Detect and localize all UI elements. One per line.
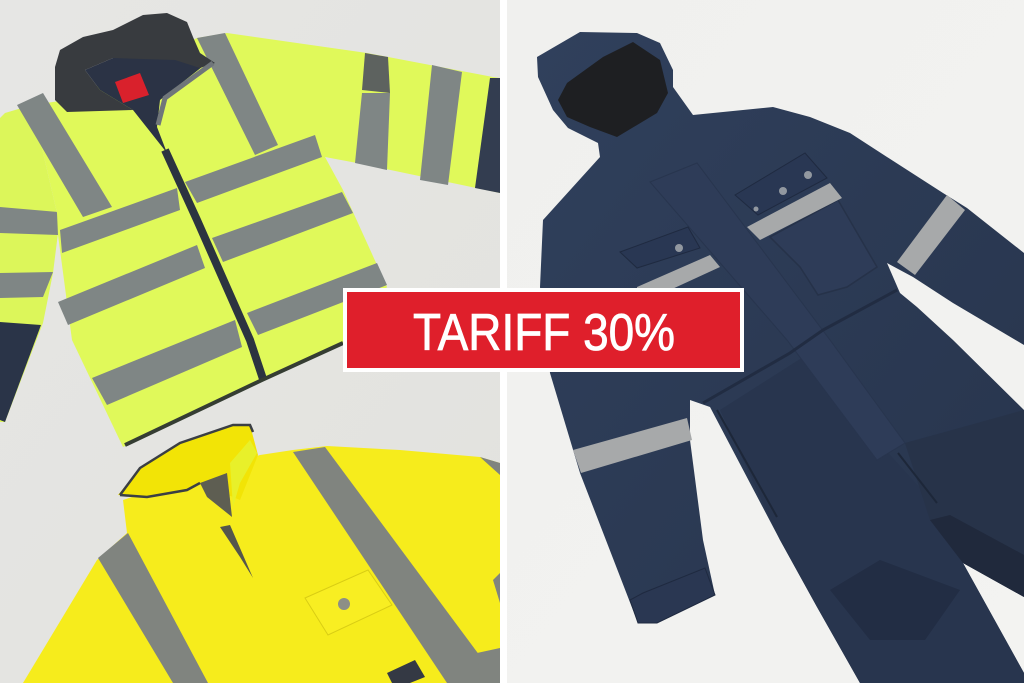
right cuff — [475, 78, 500, 193]
chest pocket flap left — [620, 227, 700, 268]
crotch line — [898, 453, 937, 503]
yellow jacket collar — [118, 425, 258, 500]
interior lining — [200, 473, 232, 517]
chest reflective band left — [637, 255, 720, 290]
hem — [125, 343, 343, 445]
yellow jacket label — [387, 660, 425, 683]
panel: lime hi-vis jacket — [0, 13, 500, 447]
pocket slit — [717, 410, 777, 517]
collar edge piping — [120, 425, 253, 495]
grey zipper tape — [158, 63, 213, 125]
collar flap highlight — [230, 440, 257, 507]
leg shading — [720, 340, 1024, 683]
collar front piping — [120, 483, 200, 497]
sleeve label patch — [362, 53, 390, 93]
front placket — [650, 163, 905, 460]
inner lining — [85, 58, 207, 153]
lower interior lining — [220, 525, 253, 578]
chest reflective band right — [747, 183, 842, 240]
banner text: TARIFF 30% — [413, 304, 675, 362]
coverall outline — [537, 32, 1024, 683]
pocket button — [338, 598, 350, 610]
collar — [55, 13, 215, 112]
chest pocket right — [770, 200, 877, 295]
cuff tab — [630, 568, 715, 623]
sleeve reflective band right — [897, 195, 965, 275]
zipper — [165, 150, 263, 379]
reflective stripes — [17, 33, 462, 405]
sleeve reflective band left — [573, 418, 692, 473]
waist seam — [703, 290, 897, 403]
coverall buttons — [675, 171, 812, 252]
chest pocket flap right — [735, 153, 827, 215]
crotch shadow — [930, 515, 1024, 597]
pocket flap — [305, 570, 392, 635]
dark fold on leg — [830, 560, 960, 640]
panel: right background — [507, 0, 1024, 683]
red neck label — [115, 73, 149, 103]
panel: navy coverall — [537, 32, 1024, 683]
lime jacket body and right sleeve — [32, 33, 500, 447]
right leg shading — [905, 410, 1024, 597]
lime jacket left sleeve — [0, 105, 58, 422]
panel: yellow hi-vis jacket — [23, 425, 500, 683]
yellow jacket stripes — [98, 447, 500, 683]
hood lining — [558, 42, 668, 137]
panel: left background — [0, 0, 500, 683]
callout: tariff banner — [345, 290, 742, 370]
yellow jacket body — [23, 446, 500, 683]
